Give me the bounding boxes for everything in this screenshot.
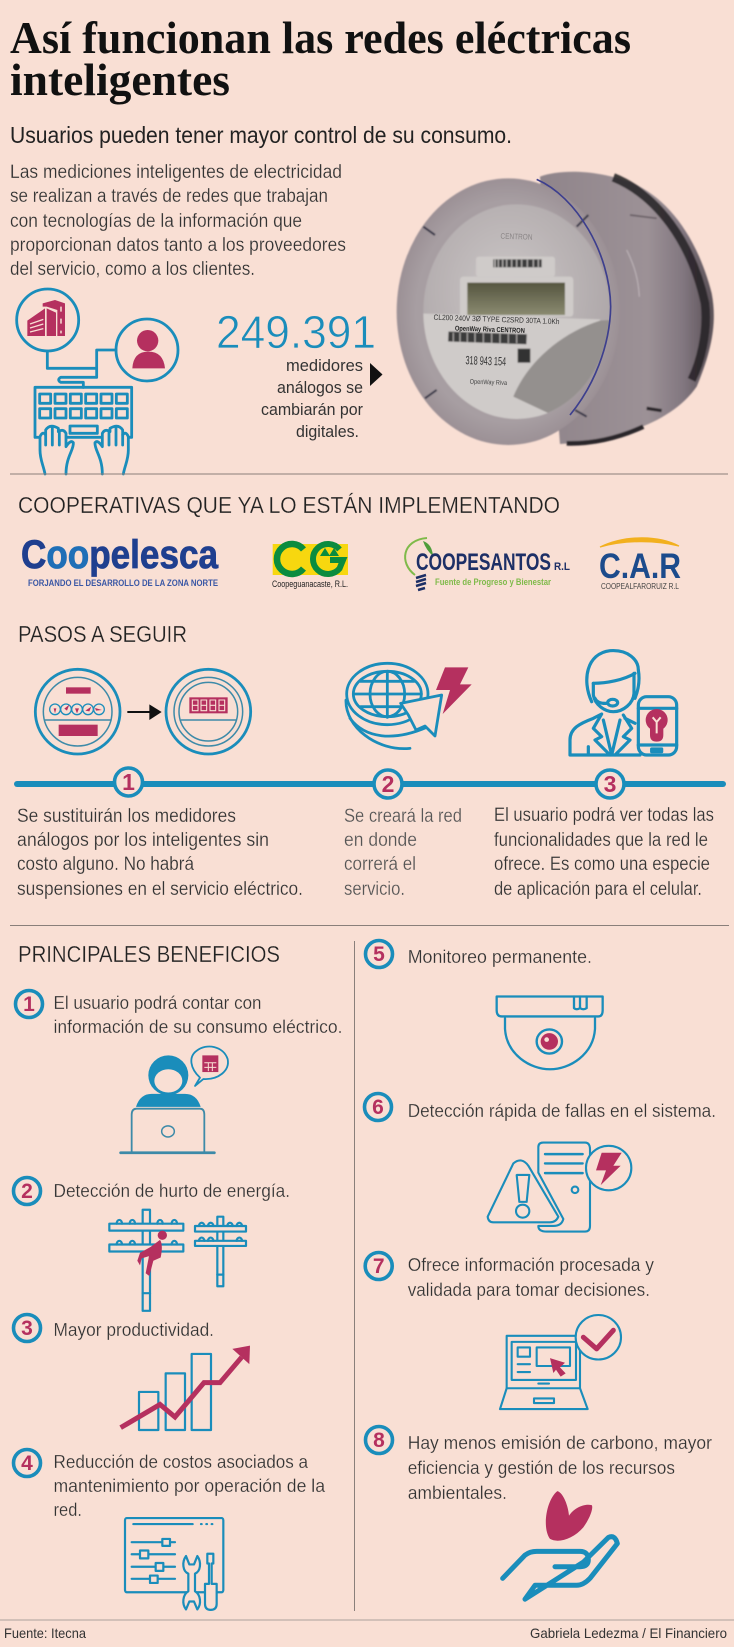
benefit 2: Detección de hurto de energía. [54, 1181, 290, 1201]
icon: analog to digital meter [35, 669, 251, 754]
intro text: Las mediciones inteligentes de electricidad [10, 162, 342, 183]
benefit 8 [366, 1426, 712, 1503]
benefit 4: Reducción de costos asociados a [54, 1452, 309, 1472]
logo: C.A.R [599, 538, 681, 591]
step badge 2: 2 [382, 771, 394, 797]
number caption: digitales. [296, 422, 359, 441]
step 3 text [494, 805, 714, 900]
heading: steps: PASOS A SEGUIR [18, 621, 187, 647]
benefit 7: Ofrece información procesada y [408, 1255, 654, 1275]
number caption: análogos se [277, 378, 363, 397]
step 1 text: costo alguno. No habrá [17, 854, 194, 875]
benefit 6: Detección rápida de fallas en el sistema. [408, 1101, 716, 1121]
logo: Coopesantos: Fuente de Progreso y Bienestar [435, 577, 551, 587]
step 3 text: de aplicación para el celular. [494, 879, 702, 900]
number caption [261, 356, 363, 441]
benefit 1: información de su consumo eléctrico. [54, 1017, 342, 1037]
step badge 3 [596, 770, 624, 798]
title: Así funcionan las redes eléctricas [10, 12, 631, 63]
step 2 text: en donde [344, 830, 417, 851]
benefit 1: El usuario podrá contar con [54, 993, 262, 1013]
intro text: proporcionan datos tanto a los proveedores [10, 235, 346, 256]
step 1 text: análogos por los inteligentes sin [17, 830, 269, 851]
step 1 text [17, 806, 303, 900]
number caption: medidores [286, 356, 363, 375]
step 2 text: correrá el [344, 854, 416, 875]
benefit 8: 8 [373, 1429, 385, 1452]
meter label text: OpenWay Riva CENTRON [455, 325, 525, 335]
divider [10, 924, 729, 926]
icon: globe and lightning [346, 663, 472, 749]
step badge 1: 1 [122, 769, 135, 795]
benefit 4 [14, 1450, 326, 1520]
title [10, 12, 631, 105]
benefit 5: 5 [373, 943, 385, 966]
step 3 text: funcionalidades que la red le [494, 830, 708, 851]
benefit 3 [14, 1314, 214, 1342]
benefit 2 [14, 1178, 290, 1204]
source: Fuente: Itecna [4, 1625, 86, 1641]
step badge 1 [114, 768, 142, 796]
icon: building [27, 300, 65, 336]
benefit 7: 7 [373, 1255, 385, 1278]
icon: alert and server [488, 1143, 631, 1232]
step 2 text [344, 806, 462, 900]
icon: growth chart [121, 1346, 250, 1430]
intro text: con tecnologías de la información que [10, 211, 302, 232]
subtitle: Usuarios pueden tener mayor control de su consumo. [10, 122, 512, 148]
step 1 text: Se sustituirán los medidores [17, 806, 236, 827]
credit: Gabriela Ledezma / El Financiero [530, 1625, 727, 1641]
meter label text: CL200 240V 3Ø TYPE C2SRD 30TA 1.0Kh [433, 313, 560, 326]
benefit 3: Mayor productividad. [54, 1320, 214, 1340]
icon: hand with leaves [503, 1491, 617, 1599]
step 2 text: servicio. [344, 879, 405, 900]
benefit 7: validada para tomar decisiones. [408, 1280, 650, 1300]
meter label text [431, 229, 563, 389]
intro text: se realizan a través de redes que trabajan [10, 186, 328, 207]
intro text: del servicio, como a los clientes. [10, 259, 255, 280]
benefit 4: 4 [21, 1452, 33, 1475]
meter label text: OpenWay Riva [470, 379, 507, 387]
number caption: cambiarán por [261, 400, 363, 419]
icon: settings window and tools [125, 1518, 223, 1610]
benefit 8: Hay menos emisión de carbono, mayor [408, 1433, 712, 1453]
logo: Coopesantos: R.L [554, 561, 570, 573]
meter label text: 318 943 154 [465, 353, 507, 369]
logo: Coopelesca: Coopelesca [21, 533, 219, 577]
icon: security camera [497, 996, 603, 1069]
benefit 2: 2 [21, 1180, 33, 1203]
benefit 4: mantenimiento por operación de la [54, 1476, 326, 1496]
step badge 3: 3 [604, 771, 616, 797]
logo: Coopeguanacaste: Coopeguanacaste, R.L. [272, 579, 348, 589]
photo: smart meter [397, 172, 714, 445]
benefit 6: 6 [372, 1096, 384, 1119]
timeline [17, 768, 723, 798]
arrow: pointer to meter [370, 363, 382, 386]
logo: Coopesantos [405, 538, 570, 590]
step 2 text: Se creará la red [344, 806, 462, 827]
intro text [10, 162, 346, 280]
heading: cooperatives: COOPERATIVAS QUE YA LO ESTÁN IMPLEMENTANDO [18, 492, 560, 518]
icon: agent with phone [570, 651, 677, 755]
step badge 2 [374, 770, 402, 798]
logo: C.A.R: C.A.R [599, 547, 681, 586]
benefit 6 [364, 1094, 716, 1121]
icon: user at laptop [121, 1046, 228, 1153]
column divider [354, 941, 356, 1611]
benefit 5 [366, 940, 592, 968]
benefit 1 [16, 990, 342, 1037]
benefit 3: 3 [21, 1317, 33, 1340]
icon: poles and climber [109, 1210, 246, 1311]
benefit 5: Monitoreo permanente. [408, 947, 592, 967]
benefit 1: 1 [23, 993, 35, 1016]
step 1 text: suspensiones en el servicio eléctrico. [17, 879, 303, 900]
logo: Coopelesca: FORJANDO EL DESARROLLO DE LA ZONA NORTE [28, 578, 218, 588]
meter label text: CENTRON [500, 232, 533, 242]
big number: 249.391 [216, 306, 376, 358]
icon: laptop and check [500, 1315, 621, 1409]
benefit 8: eficiencia y gestión de los recursos [408, 1458, 675, 1478]
divider [10, 473, 728, 475]
benefit 4: red. [54, 1500, 82, 1520]
climber [137, 1231, 167, 1276]
icon: person [132, 330, 165, 368]
arrow: replacement [127, 704, 162, 720]
logo: Coopesantos: COOPESANTOS [416, 549, 551, 576]
benefit 8: ambientales. [408, 1483, 507, 1503]
title: inteligentes [10, 54, 230, 105]
logo: Coopeguanacaste [272, 544, 348, 589]
icon: user network keyboard [17, 289, 178, 474]
heading: benefits: PRINCIPALES BENEFICIOS [18, 941, 280, 967]
divider [0, 1619, 734, 1621]
benefit 7 [365, 1252, 654, 1300]
digital meter [166, 669, 251, 754]
logo: C.A.R: COOPEALFARORUIZ R.L [601, 581, 679, 591]
analog meter [35, 669, 120, 754]
step 3 text: ofrece. Es como una especie [494, 854, 710, 875]
